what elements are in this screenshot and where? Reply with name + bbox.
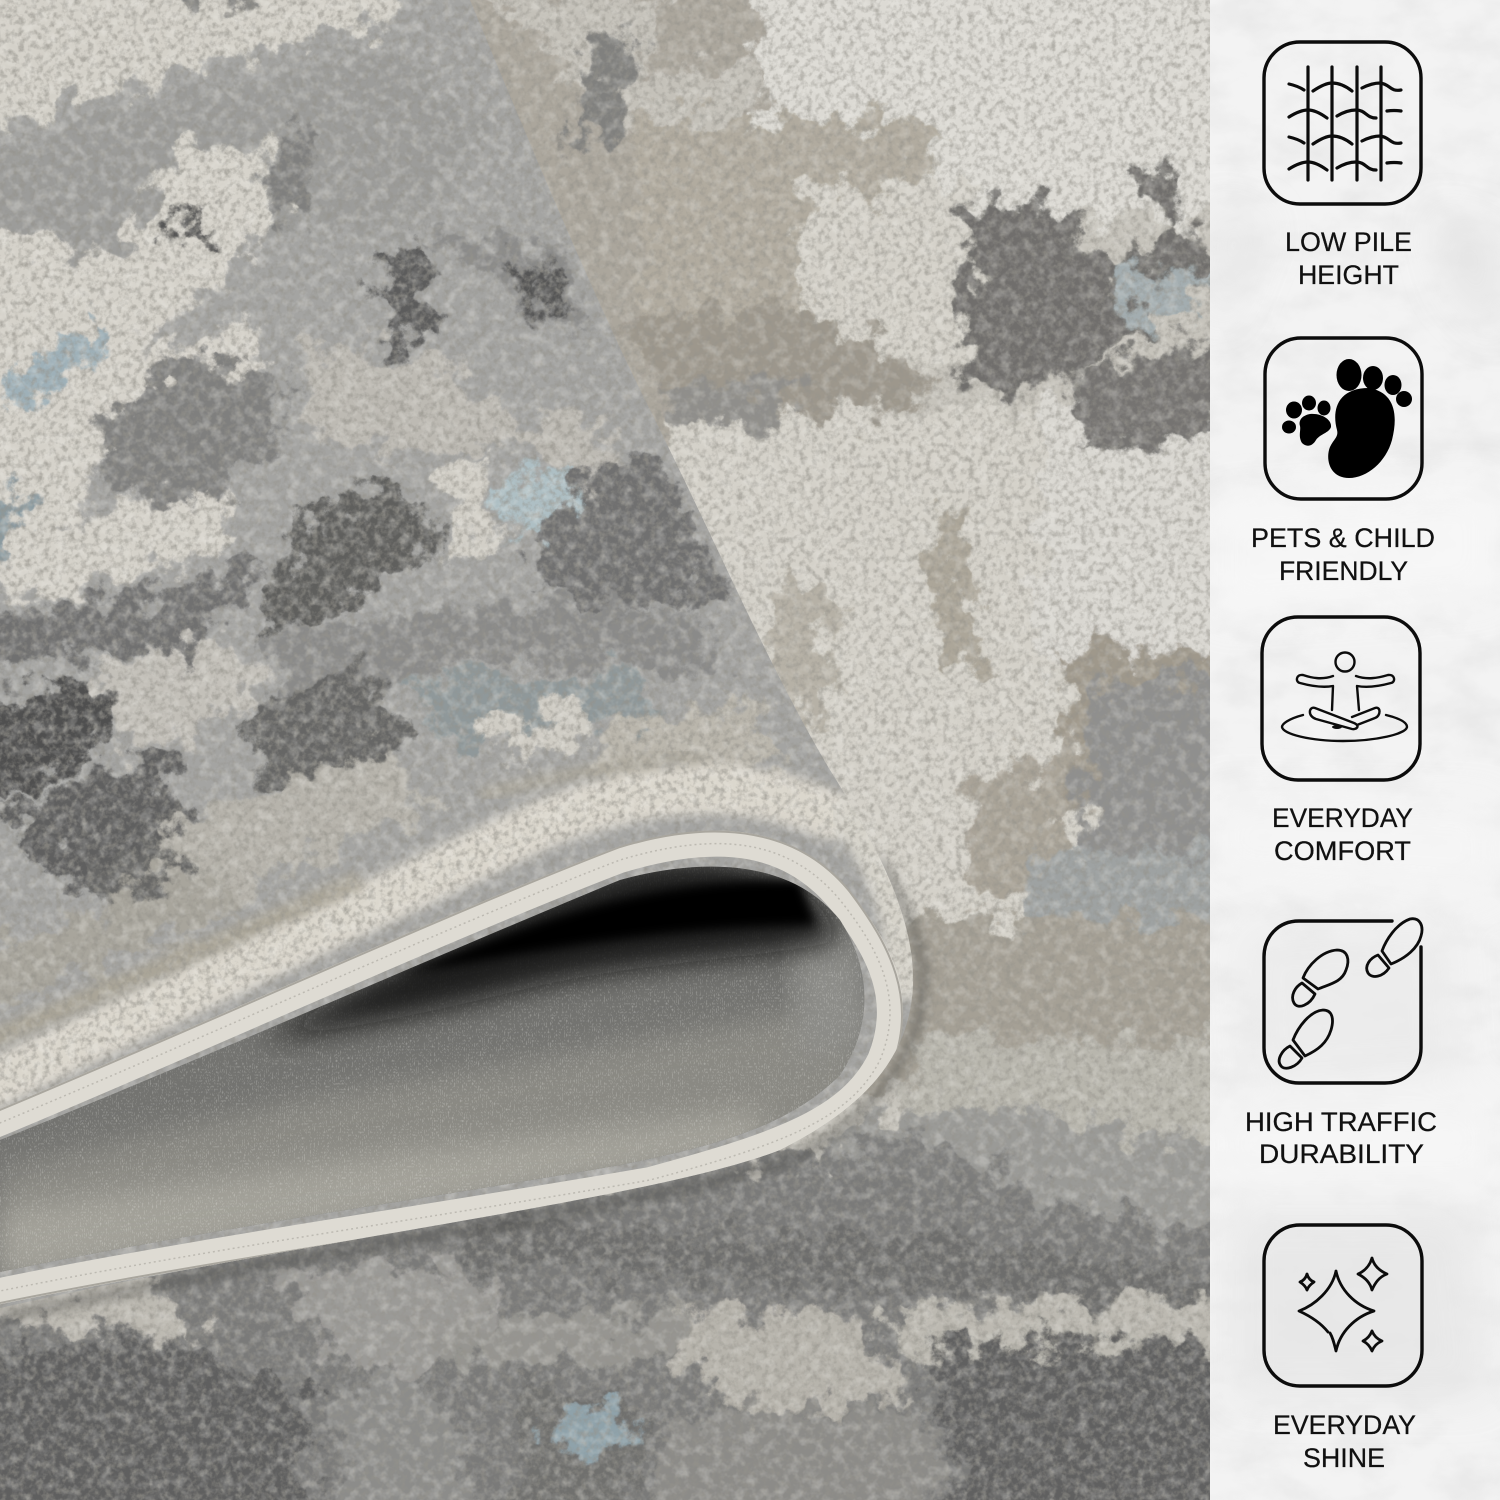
label: low pile height: HEIGHT [1298, 260, 1399, 290]
label: everyday comfort [1272, 803, 1413, 866]
label: everyday comfort: EVERYDAY [1272, 803, 1413, 833]
label: high traffic durability: HIGH TRAFFIC [1245, 1107, 1437, 1137]
panel: features sidebar [1210, 0, 1500, 1500]
label: pets and child friendly: FRIENDLY [1279, 556, 1408, 586]
label: low pile height: LOW PILE [1285, 227, 1412, 257]
feature: everyday comfort [1262, 617, 1420, 866]
rolled rim binding [0, 844, 890, 1292]
roll pile surface [0, 0, 930, 1320]
icon: paw and foot print [1265, 338, 1422, 499]
rug shadow under the roll [0, 860, 923, 1318]
label: low pile height [1285, 227, 1412, 290]
feature: everyday shine [1264, 1225, 1422, 1473]
cream fringe along lip [0, 790, 830, 1085]
label: high traffic durability [1245, 1107, 1437, 1169]
icon: seated person on rug [1262, 617, 1420, 780]
rolled rug corner [0, 0, 930, 1320]
icon: sparkles [1264, 1225, 1422, 1386]
label: everyday shine: EVERYDAY [1273, 1410, 1416, 1440]
label: high traffic durability: DURABILITY [1259, 1139, 1424, 1169]
label: everyday comfort: COMFORT [1274, 836, 1411, 866]
feature: low pile height [1264, 42, 1421, 290]
feature: high traffic durability [1245, 919, 1437, 1169]
label: pets and child friendly [1251, 523, 1435, 586]
rug backing and dark opening [0, 866, 864, 1272]
icon: woven pile grid [1264, 42, 1421, 204]
label: everyday shine: SHINE [1303, 1443, 1385, 1473]
feature: pets and child friendly [1251, 338, 1435, 586]
label: pets and child friendly: PETS & CHILD [1251, 523, 1435, 553]
label: everyday shine [1273, 1410, 1416, 1473]
icon: shoe prints [1264, 919, 1422, 1083]
